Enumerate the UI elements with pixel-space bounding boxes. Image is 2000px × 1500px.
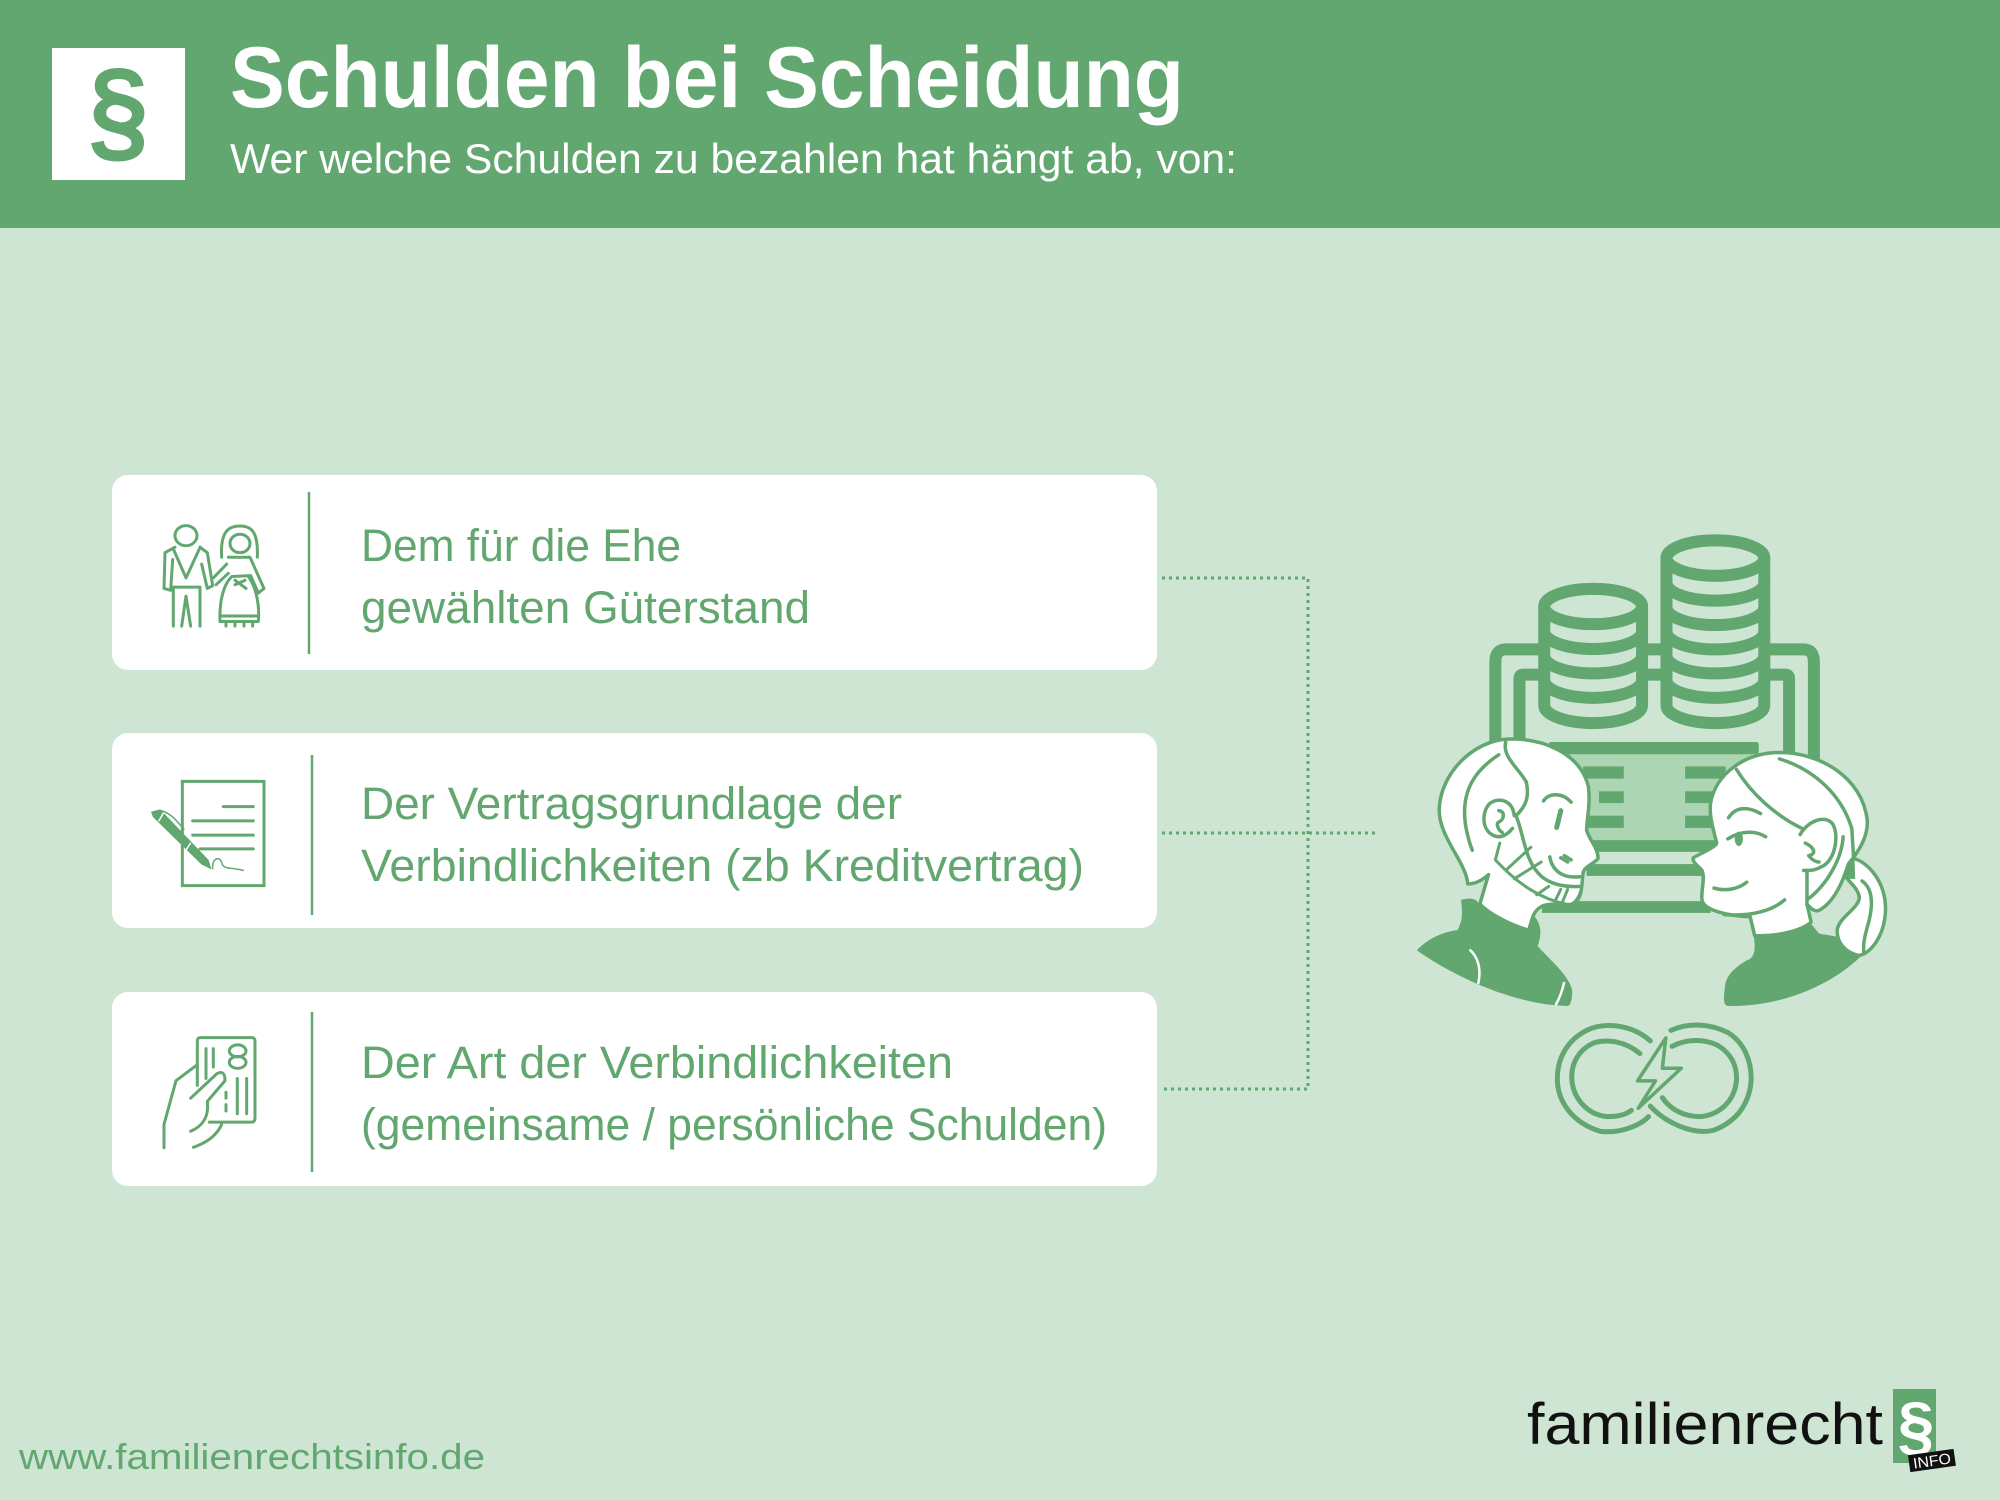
icon: paragraph symbol in white square xyxy=(52,48,185,180)
man xyxy=(1417,739,1598,1006)
subtitle: Wer welche Schulden zu bezahlen hat hängt ab, von: xyxy=(230,135,1237,182)
icon: paragraph symbol in white square: § xyxy=(87,51,149,174)
logo: familienrecht info: § xyxy=(1898,1388,1934,1462)
text: Art der Verbindlichkeiten xyxy=(361,1037,1107,1150)
text: Güterstand xyxy=(361,520,810,633)
text: Vertragsgrundlage xyxy=(361,778,1084,891)
illustration: couple, money and broken infinity xyxy=(1417,540,1886,1132)
icon: hand holding card xyxy=(164,1038,255,1148)
woman xyxy=(1693,753,1886,1006)
icon: signed contract with pen xyxy=(152,781,264,886)
divider xyxy=(311,755,313,915)
banknote and laptop frames xyxy=(1495,649,1814,913)
panel: Art der Verbindlichkeiten xyxy=(112,992,1157,1186)
coin stack: right xyxy=(1666,540,1764,723)
text: Vertragsgrundlage: Der Vertragsgrundlage der xyxy=(361,778,902,829)
logo: familienrecht info xyxy=(1527,1388,1956,1473)
panel: Güterstand xyxy=(112,475,1157,670)
divider xyxy=(311,1012,313,1172)
text: Art der Verbindlichkeiten: (gemeinsame / persönliche Schulden) xyxy=(361,1099,1107,1150)
icon: wedding couple xyxy=(164,526,264,626)
title: Schulden bei Scheidung xyxy=(230,30,1184,126)
panel: Vertragsgrundlage xyxy=(112,733,1157,928)
text: Güterstand: Dem für die Ehe xyxy=(361,520,681,571)
logo: familienrecht info: familienrecht xyxy=(1527,1392,1883,1457)
icon: broken infinity with lightning xyxy=(1557,1025,1751,1132)
coin stack: left xyxy=(1544,589,1642,723)
logo: familienrecht info: INFO xyxy=(1912,1450,1952,1473)
connector: dotted lines xyxy=(1162,578,1375,1089)
footer url: www.familienrechtsinfo.de xyxy=(18,1436,485,1477)
text: Art der Verbindlichkeiten: Der Art der Verbindlichkeiten xyxy=(361,1037,953,1088)
header band xyxy=(0,0,2000,228)
divider xyxy=(308,492,310,654)
text: Vertragsgrundlage: Verbindlichkeiten (zb Kreditvertrag) xyxy=(361,840,1084,891)
text: Güterstand: gewählten Güterstand xyxy=(361,582,810,633)
